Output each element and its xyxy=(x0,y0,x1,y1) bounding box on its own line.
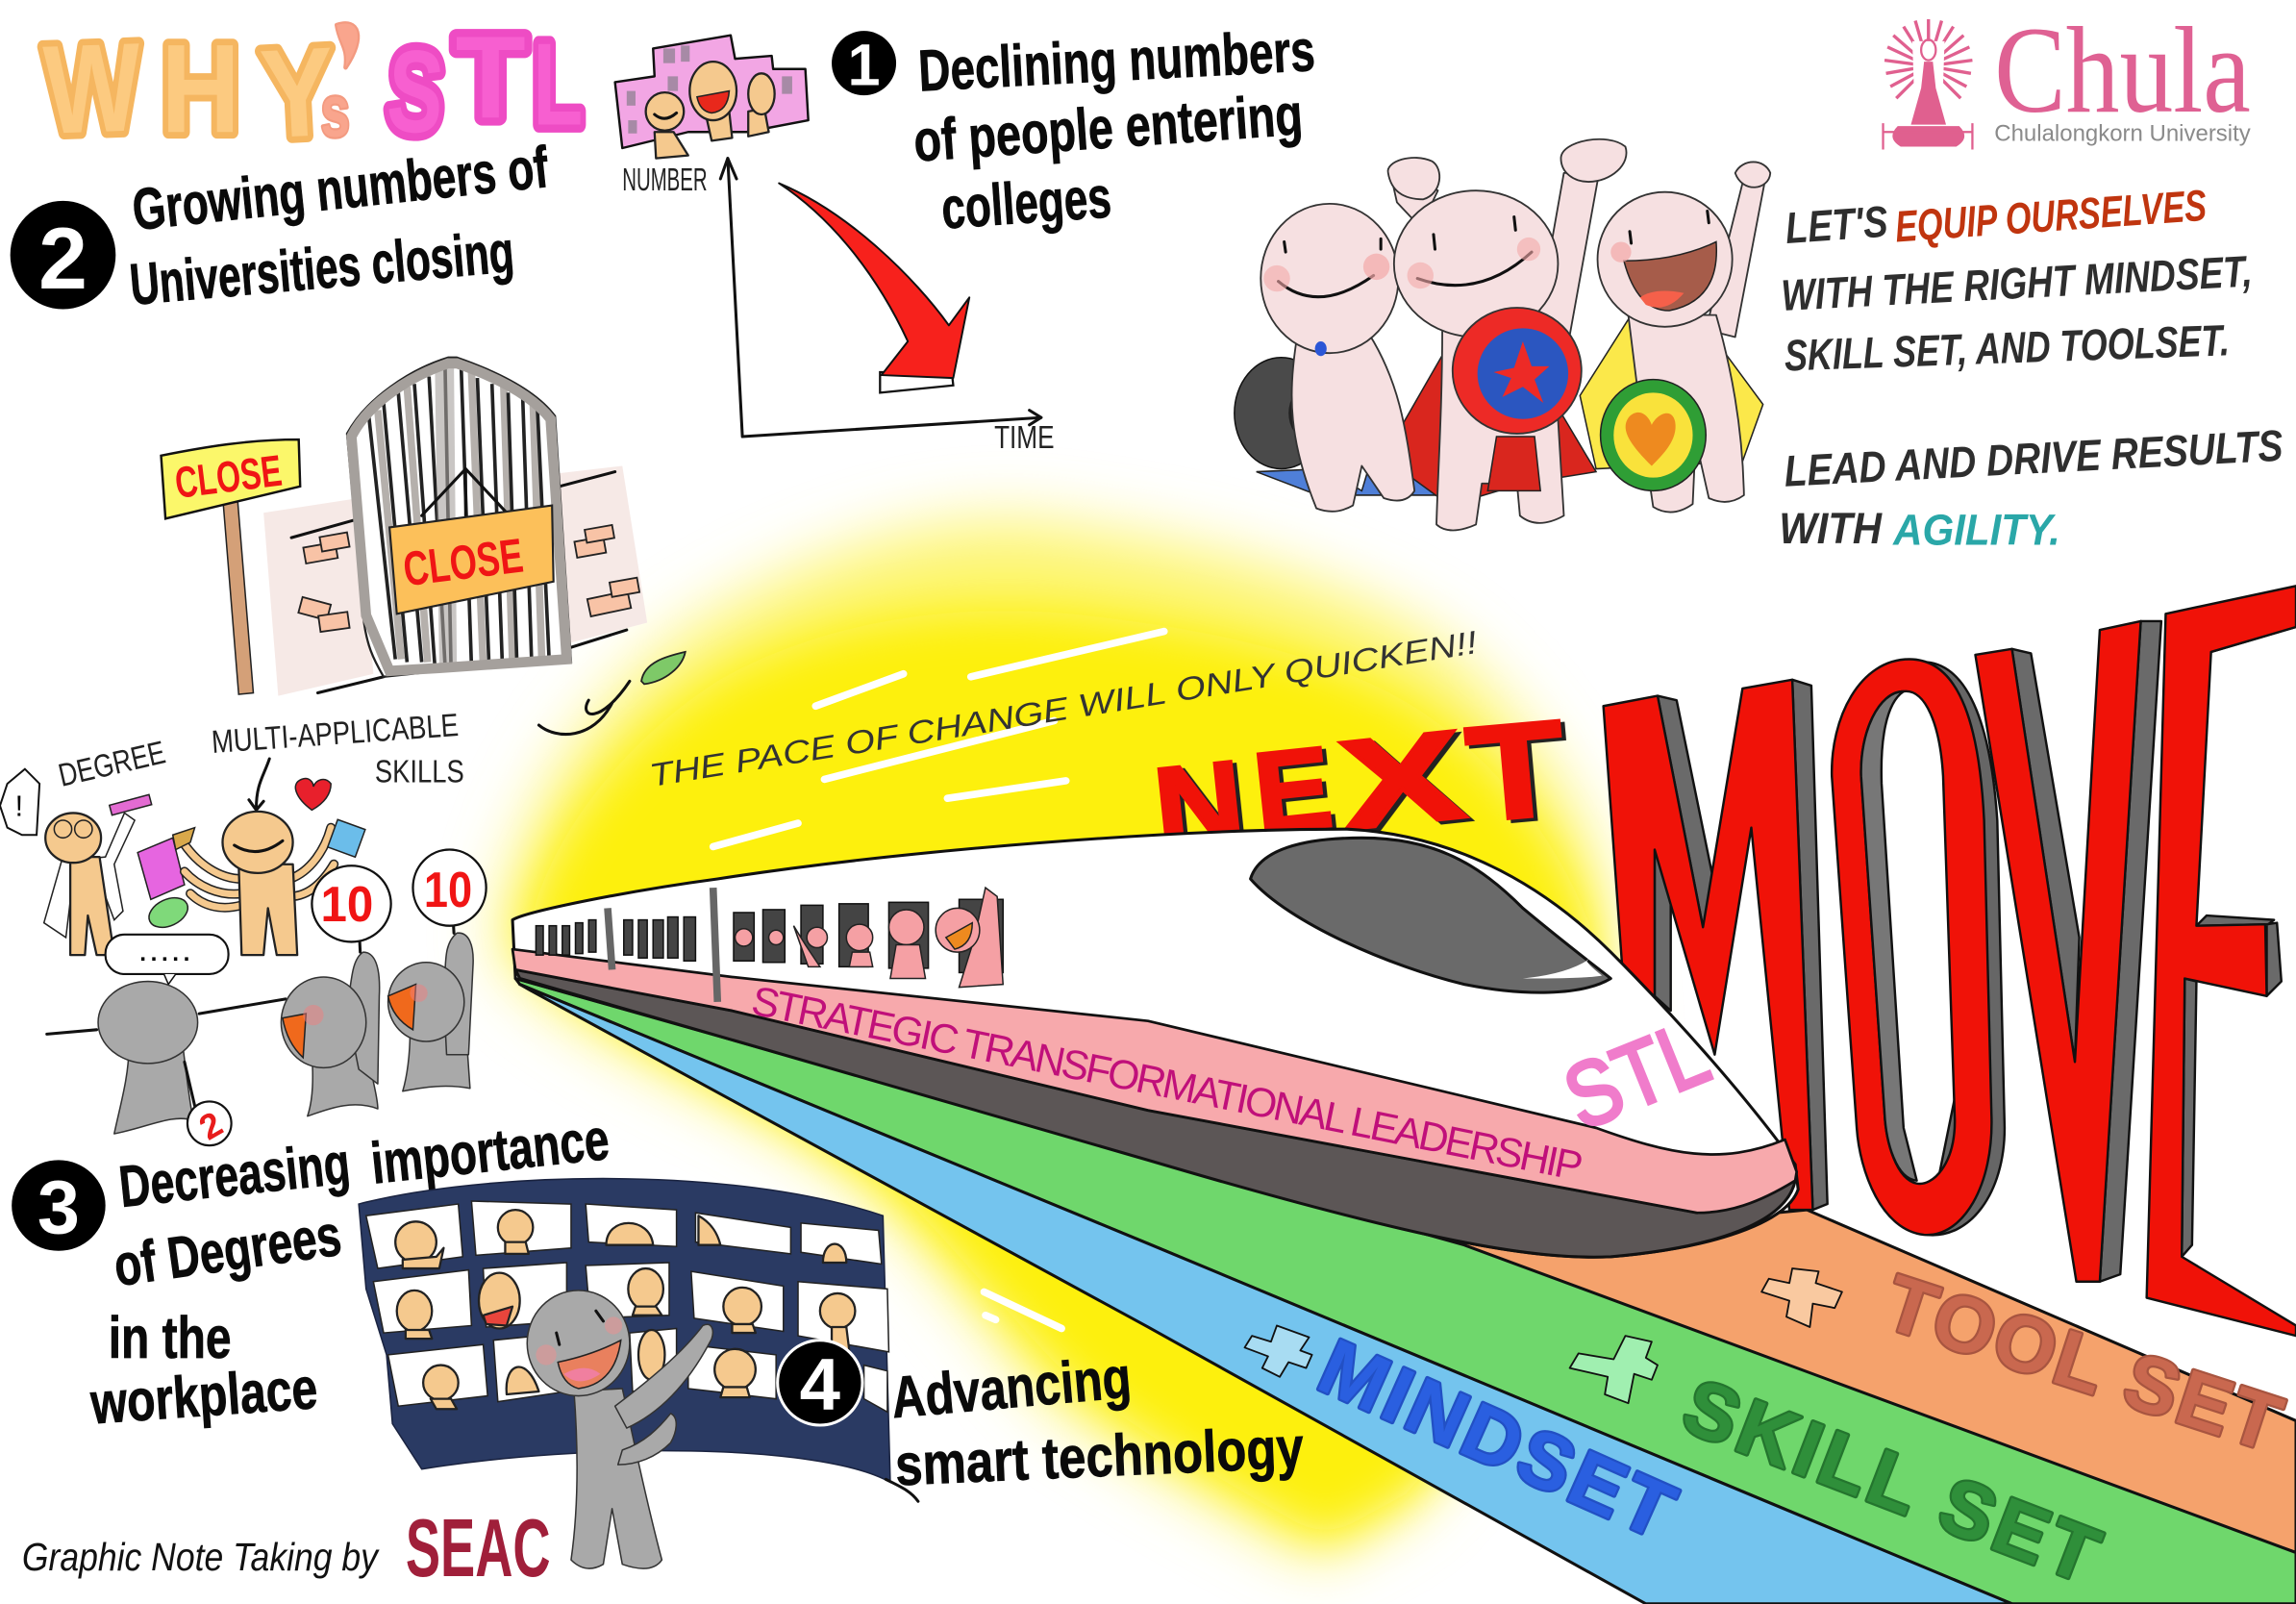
letter M xyxy=(1604,680,1828,1210)
heading 2: universities closing: Growing numbers of xyxy=(129,134,552,242)
number 2 badge xyxy=(11,201,115,310)
word: MOVE xyxy=(1604,586,2296,1336)
hero 1 xyxy=(1260,158,1439,512)
speech bubble xyxy=(106,935,229,985)
number 1 badge xyxy=(832,31,896,98)
word: NEXT: X xyxy=(1333,703,1470,856)
text block: call to action: WITH xyxy=(1779,504,1883,553)
number 4 badge: 4 xyxy=(800,1343,840,1425)
number 2 badge: 2 xyxy=(38,210,87,308)
figure: gray listener xyxy=(98,982,232,1147)
icon: heart xyxy=(295,779,331,810)
icon: pink paper xyxy=(137,838,185,899)
title: Why's STL: H xyxy=(162,17,240,159)
icon: captain shield xyxy=(1453,308,1582,434)
icon: building with students xyxy=(615,36,809,159)
heading 1: declining numbers xyxy=(911,17,1316,241)
heading 4: advancing smart technology: Advancing xyxy=(888,1344,1134,1430)
track label: mindset: MINDSET xyxy=(1307,1323,1687,1557)
logo: Chula: Chula xyxy=(1994,2,2251,138)
icon: exclamation bubble: ! xyxy=(15,789,23,822)
heading 3: decreasing importance: Decreasing xyxy=(116,1130,353,1219)
title: Why's STL xyxy=(41,12,583,164)
train xyxy=(512,829,1798,1257)
heading 2: universities closing xyxy=(127,134,552,317)
hero 3 xyxy=(1598,162,1770,513)
icon: heart shield xyxy=(1601,380,1706,490)
window row 2 xyxy=(373,1263,888,1352)
title: Why's STL: s xyxy=(321,71,350,153)
heading 2: universities closing: Universities closing xyxy=(127,218,516,317)
heading 4: advancing smart technology xyxy=(888,1344,1305,1497)
figure: gray scorer two: 10 xyxy=(424,862,472,917)
illustration: hero team xyxy=(1235,139,1770,530)
heading 3: decreasing importance: importance xyxy=(368,1106,612,1196)
train underside xyxy=(515,969,1795,1257)
title: Why's STL: W xyxy=(41,15,143,161)
number 4 badge xyxy=(778,1341,862,1425)
presenter xyxy=(527,1291,712,1568)
label: degree: DEGREE xyxy=(55,735,169,794)
icon: university emblem xyxy=(1884,19,1972,150)
figure: gray scorer two xyxy=(388,849,487,1091)
icon: green blob xyxy=(144,892,192,933)
letter O xyxy=(1832,660,2005,1235)
figure: graduate xyxy=(44,794,152,955)
train pink band xyxy=(512,949,1797,1213)
window row 1 xyxy=(366,1201,882,1268)
figure: gray scorer one: 10 xyxy=(321,876,373,932)
heading 4: advancing smart technology: smart technology xyxy=(894,1415,1305,1497)
chart: declining number over time xyxy=(622,159,1055,456)
title: Why's STL: L xyxy=(533,19,583,150)
heading 1: declining numbers: Declining numbers xyxy=(917,17,1316,104)
letter V xyxy=(1975,621,2161,1282)
icon: leaf with curl xyxy=(538,652,686,735)
word: NEXT xyxy=(1149,691,1571,873)
illustration: skills scene xyxy=(0,708,487,1147)
text block: call to action: AGILITY. xyxy=(1892,506,2060,555)
speech bubble: ..... xyxy=(139,940,194,966)
heading 3: decreasing importance xyxy=(87,1106,612,1437)
train windows xyxy=(536,899,1003,972)
heading 1: declining numbers: colleges xyxy=(939,164,1113,241)
yellow speed glow xyxy=(498,521,1625,1560)
train STL logo: STL xyxy=(1551,1002,1722,1149)
credit: graphic note taking xyxy=(22,1503,551,1594)
passengers in windows xyxy=(736,888,1003,988)
icon: calculator xyxy=(328,819,365,857)
track label: tool set: TOOL SET xyxy=(1875,1259,2292,1468)
word: NEXT: E xyxy=(1248,723,1337,858)
illustration: closed university gate xyxy=(162,358,647,696)
label: multi-applicable skills: SKILLS xyxy=(375,754,464,789)
figure: gray scorer one xyxy=(281,865,391,1116)
letter E xyxy=(2147,586,2296,1336)
window row 3 xyxy=(388,1329,887,1412)
train windshield xyxy=(1251,838,1610,992)
chart: declining number over time: NUMBER xyxy=(622,163,708,198)
title: Why's STL: S xyxy=(384,24,448,159)
number 1 badge: 1 xyxy=(848,33,880,98)
credit: graphic note taking: Graphic Note Taking by xyxy=(22,1535,380,1579)
text: the pace of change: THE PACE OF CHANGE WILL ONLY QUICKEN!! xyxy=(647,625,1480,794)
heading 1: declining numbers: of people entering xyxy=(911,82,1305,174)
illustration: closed university gate: CLOSE xyxy=(172,446,285,508)
heading 3: decreasing importance: workplace xyxy=(87,1355,319,1437)
logo: Chula: Chulalongkorn University xyxy=(1994,120,2252,146)
number 3 badge xyxy=(12,1160,106,1251)
title: Why's STL: T xyxy=(456,12,526,142)
figure: multi-armed worker xyxy=(173,812,334,955)
icon: exclamation bubble xyxy=(0,769,39,835)
text block: call to action: LET'S xyxy=(1784,197,1889,253)
tracks: orange, green and blue xyxy=(515,979,2296,1604)
speed lines xyxy=(713,632,1164,1329)
heading 3: decreasing importance: of Degrees xyxy=(110,1202,345,1298)
icon: tire xyxy=(1235,358,1328,469)
illustration: closed university gate: CLOSE xyxy=(400,528,526,596)
text block: call to action xyxy=(1779,181,2284,555)
figure: gray listener: 2 xyxy=(192,1104,229,1147)
word: NEXT: N xyxy=(1149,737,1250,873)
heading 3: decreasing importance: in the xyxy=(109,1305,232,1370)
chart: declining number over time: TIME xyxy=(994,420,1055,456)
word: NEXT: T xyxy=(1461,691,1571,850)
train body xyxy=(512,829,1798,1257)
train door seams xyxy=(608,888,717,1002)
track label: skill set: SKILL SET xyxy=(1672,1363,2110,1601)
hero 2 xyxy=(1394,139,1627,530)
label: multi-applicable skills xyxy=(211,708,464,810)
meeting participants xyxy=(395,1210,855,1409)
title: Why's STL: Y xyxy=(258,20,337,164)
label: multi-applicable skills: MULTI-APPLICABLE xyxy=(211,708,460,761)
number 3 badge: 3 xyxy=(37,1165,80,1250)
train lettering: STRATEGIC TRANSFORMATIONAL LEADERSHIP xyxy=(748,978,1586,1190)
illustration: video call wall xyxy=(359,1179,918,1568)
logo: Chula xyxy=(1884,2,2252,150)
credit: graphic note taking: SEAC xyxy=(406,1503,551,1594)
